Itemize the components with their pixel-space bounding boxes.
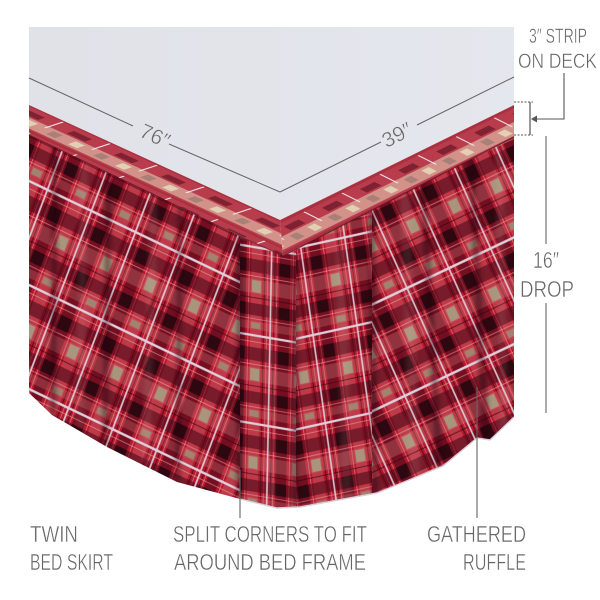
bed skirt fabric bbox=[29, 105, 514, 508]
gathered seam bbox=[29, 135, 514, 256]
label: twin bed skirt: TWIN bbox=[30, 521, 78, 547]
leader: split corners bbox=[239, 470, 241, 518]
label: twin bed skirt: BED SKIRT bbox=[30, 549, 113, 575]
line: 16 inch drop lower bbox=[545, 303, 547, 413]
leader: gathered ruffle bbox=[476, 387, 478, 518]
dimension line: 39 inch bbox=[280, 77, 514, 192]
dimension line: 76 inch bbox=[29, 78, 280, 192]
label: split corners: AROUND BED FRAME bbox=[174, 549, 366, 575]
panel: right deck strip bbox=[280, 105, 514, 256]
dimension label: 39 inch: 39″ bbox=[378, 118, 417, 153]
hem bbox=[240, 417, 514, 508]
line: 16 inch drop upper bbox=[545, 136, 547, 244]
panel: corner skirt right bbox=[296, 210, 372, 507]
panel: left side skirt bbox=[29, 133, 240, 499]
label: gathered ruffle: RUFFLE bbox=[463, 549, 526, 575]
label: 3 inch strip on deck bbox=[518, 25, 597, 73]
bracket: 3 inch strip bbox=[514, 102, 533, 135]
label: split corners bbox=[173, 521, 367, 575]
panel: corner skirt left bbox=[240, 236, 296, 508]
label: gathered ruffle bbox=[427, 521, 526, 575]
fold shading bbox=[50, 144, 508, 507]
bed deck bbox=[29, 27, 514, 220]
label: 16 inch drop: DROP bbox=[520, 276, 574, 302]
label: 16 inch drop bbox=[520, 247, 574, 302]
arrow: strip callout bbox=[531, 73, 564, 122]
label: 16 inch drop: 16″ bbox=[533, 247, 559, 273]
panel: right side skirt bbox=[372, 137, 514, 494]
label: gathered ruffle: GATHERED bbox=[427, 521, 526, 547]
dimension label: 76 inch: 76″ bbox=[136, 120, 174, 153]
panel: left deck strip bbox=[29, 105, 283, 256]
label: twin bed skirt bbox=[30, 521, 113, 575]
label: split corners: SPLIT CORNERS TO FIT bbox=[173, 521, 367, 547]
